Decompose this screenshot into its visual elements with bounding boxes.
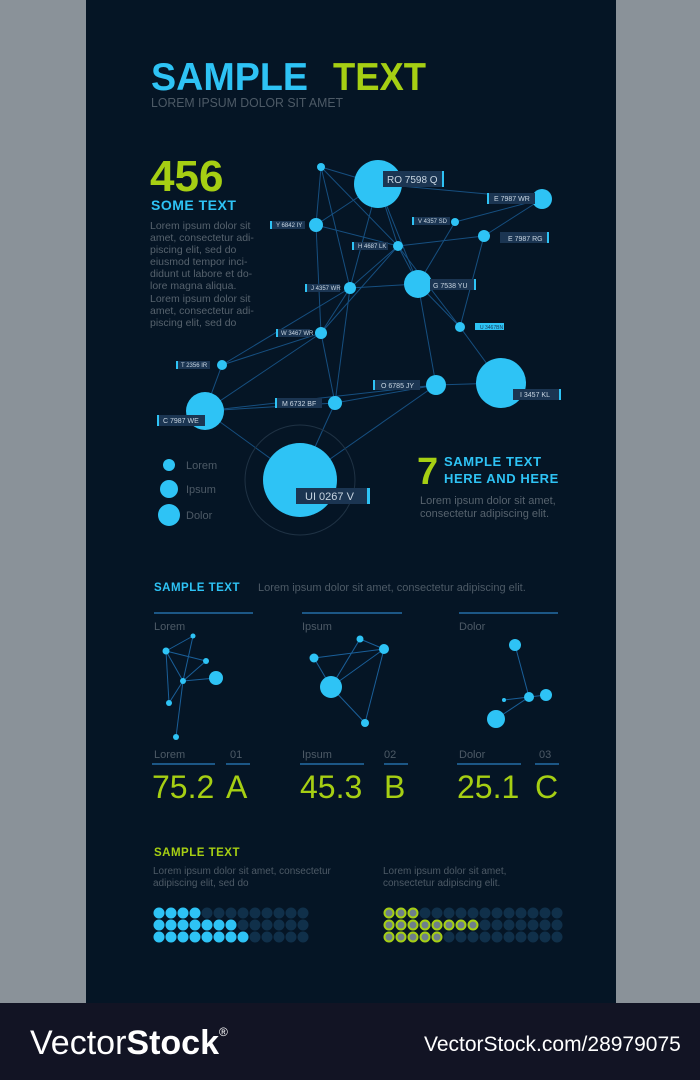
chart: network: M 6732 BF — [282, 401, 316, 408]
legend — [158, 459, 217, 526]
stats row: Dolor — [459, 749, 486, 761]
stat: 456: SOME TEXT — [151, 197, 236, 213]
callout: 7 sample text: Lorem ipsum dolor sit amet, — [420, 495, 556, 507]
stat: 456: 456 — [150, 152, 223, 201]
stats row: A — [226, 769, 248, 805]
footer band: VectorStock.com/28979075 — [424, 1033, 681, 1056]
panel: mini networks: Ipsum — [302, 621, 332, 633]
panel: mini networks: Lorem — [154, 621, 185, 633]
chart: network — [157, 160, 561, 535]
callout: 7 sample text: SAMPLE TEXT — [444, 454, 542, 469]
callout: 7 sample text: HERE AND HERE — [444, 471, 559, 486]
text block: left paragraph: Lorem ipsum dolor sit — [150, 220, 250, 232]
panel: main dark — [86, 0, 616, 1003]
chart: network: W 3467 WR — [281, 331, 314, 337]
text block: left paragraph — [150, 220, 254, 329]
chart: network: C 7987 WE — [163, 418, 199, 425]
footer band — [0, 1003, 700, 1080]
heading: section 3: SAMPLE TEXT — [154, 847, 240, 859]
stats row: 01 — [230, 749, 242, 761]
stat: 456 — [150, 152, 236, 213]
text block: left paragraph: piscing elit, sed do — [150, 244, 237, 256]
text block: left paragraph: amet, consectetur adi- — [150, 305, 254, 317]
panel: mini networks — [154, 613, 558, 740]
text block: section 3: Lorem ipsum dolor sit amet, consectetur — [153, 866, 332, 877]
text block: left paragraph: piscing elit, sed do — [150, 317, 237, 329]
stats row: Lorem — [154, 749, 185, 761]
legend: Dolor — [186, 510, 213, 522]
chart: network: U 3467BN — [480, 325, 503, 331]
text block: left paragraph: eiusmod tempor inci- — [150, 256, 248, 268]
text block: section 3: consectetur adipiscing elit. — [383, 878, 500, 889]
chart: network: I 3457 KL — [520, 392, 550, 399]
subtitle: LOREM IPSUM DOLOR SIT AMET — [151, 95, 343, 110]
legend: Lorem — [186, 460, 217, 472]
stats row — [152, 749, 559, 805]
chart: network: O 6785 JY — [381, 383, 414, 390]
chart: network: J 4357 WR — [311, 286, 341, 292]
callout: 7 sample text: consectetur adipiscing elit. — [420, 508, 549, 520]
heading: section 2: SAMPLE TEXT — [154, 582, 240, 594]
stats row: Ipsum — [302, 749, 332, 761]
text block: section 3: Lorem ipsum dolor sit amet, — [383, 866, 506, 877]
chart: network: Y 6842 IY — [276, 223, 302, 229]
stats row: 03 — [539, 749, 551, 761]
heading: section 2: Lorem ipsum dolor sit amet, consectetur adipiscing elit. — [258, 582, 526, 594]
text block: left paragraph: amet, consectetur adi- — [150, 232, 254, 244]
stats row: 75.2 — [152, 769, 214, 805]
chart: network: UI 0267 V — [305, 491, 355, 503]
text block: section 3 — [153, 866, 506, 889]
stats row: C — [535, 769, 558, 805]
callout: 7 sample text: 7 — [417, 451, 438, 493]
chart: blue dot grid — [154, 908, 308, 942]
panel: mini networks: Dolor — [459, 621, 486, 633]
chart: network: V 4357 SD — [418, 219, 448, 225]
title: SAMPLE — [151, 56, 308, 99]
stats row: B — [384, 769, 405, 805]
chart: network: T 2356 IR — [181, 363, 208, 369]
text block: section 3: adipiscing elit, sed do — [153, 878, 249, 889]
legend: Ipsum — [186, 484, 216, 496]
text block: left paragraph: lore magna aliqua. — [150, 280, 236, 292]
chart: network: H 4687 LK — [358, 244, 386, 250]
chart: network: E 7987 RG — [508, 236, 543, 243]
chart: network: E 7987 WR — [494, 196, 530, 203]
callout: 7 sample text — [417, 451, 559, 520]
stats row: 02 — [384, 749, 396, 761]
chart: network: RO 7598 Q — [387, 175, 438, 186]
text block: left paragraph: didunt ut labore et do- — [150, 268, 253, 280]
stats row: 45.3 — [300, 769, 362, 805]
stats row: 25.1 — [457, 769, 519, 805]
footer band: ® — [219, 1025, 228, 1039]
chart: green dot grid — [384, 908, 562, 942]
title — [151, 56, 426, 99]
title: TEXT — [333, 56, 426, 99]
text block: left paragraph: Lorem ipsum dolor sit — [150, 293, 250, 305]
chart: network: G 7538 YU — [433, 283, 468, 290]
footer band: VectorStock — [30, 1024, 219, 1062]
